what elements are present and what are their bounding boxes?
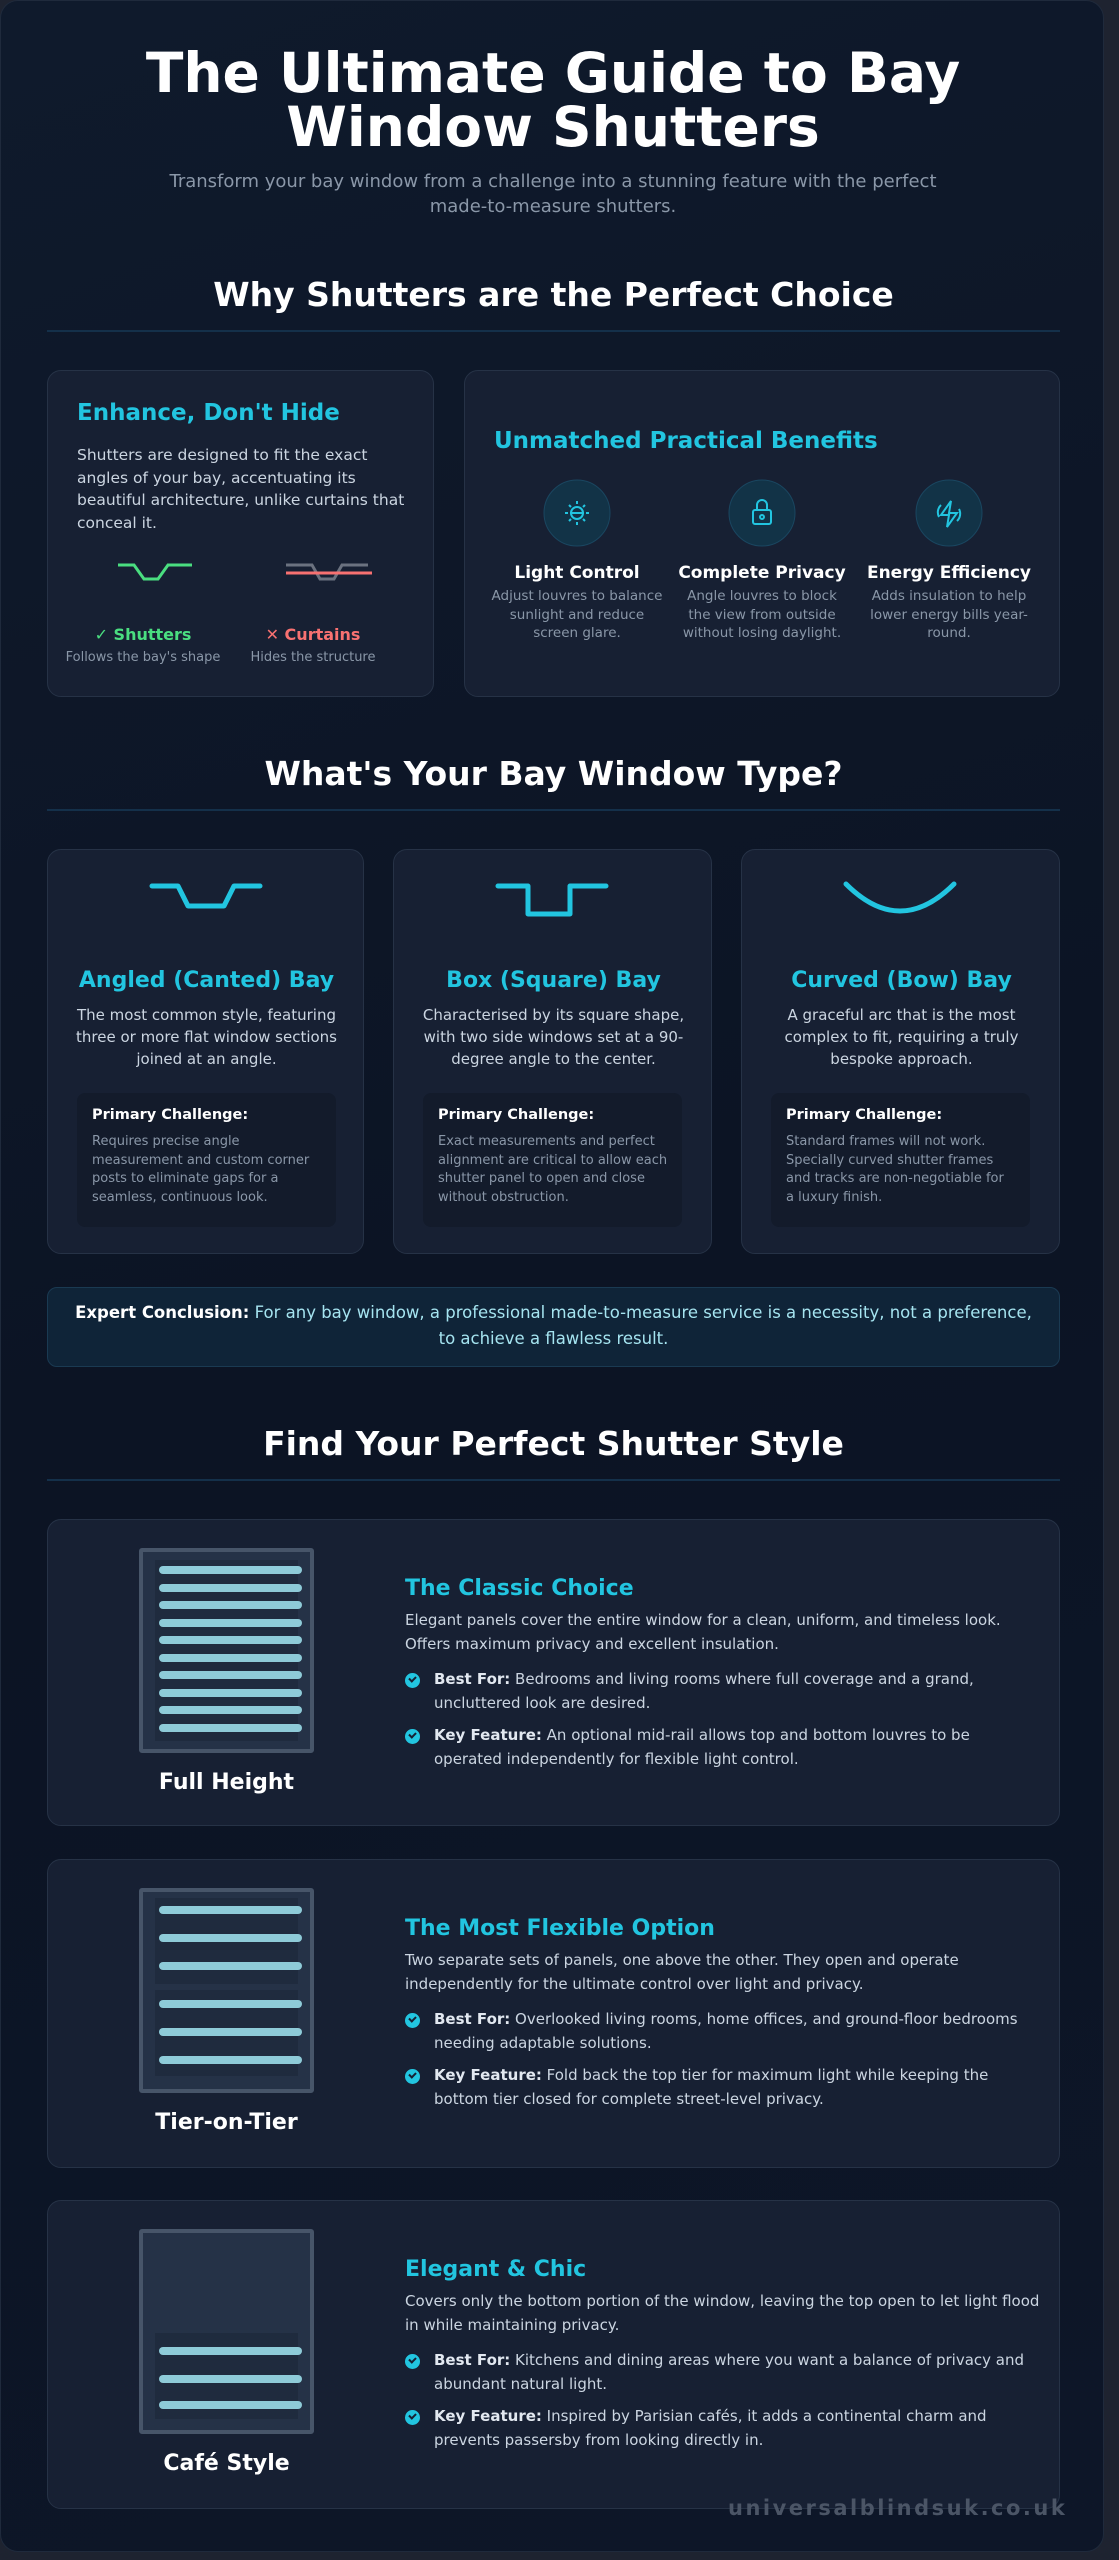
title: angled: Angled (Canted) Bay (79, 968, 334, 993)
panel: tier on tier (47, 1859, 1060, 2168)
title: curved: Curved (Bow) Bay (791, 968, 1012, 993)
icon: cafe shutter (139, 2229, 314, 2434)
text block: classic: Best For: Bedrooms and living rooms where full coverage and a grand, uncluttered look are desired. (434, 1670, 974, 1712)
benefit: energy: Energy Efficiency (867, 563, 1031, 583)
challenge: curved (771, 1093, 1030, 1227)
title: The Ultimate Guide to Bay (146, 41, 960, 105)
label: full height: Full Height (159, 1770, 294, 1795)
benefit: light control: Adjust louvres to balance sunlight and reduce screen glare. (492, 588, 662, 641)
panel: full height (47, 1519, 1060, 1826)
callout: expert conclusion (47, 1287, 1060, 1367)
text block: flexible: Key Feature: Fold back the top tier for maximum light while keeping the bottom tier closed for complete street-level privacy. (434, 2066, 988, 2108)
benefit: privacy: Angle louvres to block the view from outside without losing daylight. (683, 588, 841, 641)
challenge: angled: Primary Challenge: (92, 1107, 248, 1123)
heading: benefits: Unmatched Practical Benefits (494, 428, 878, 454)
label: curtains: Hides the structure (250, 650, 376, 665)
label: shutters (66, 625, 220, 665)
benefit: energy: Adds insulation to help lower energy bills year-round. (870, 588, 1028, 641)
text: enhance: Shutters are designed to fit the exact angles of your bay, accentuating its beautiful architecture, unlike curtains that conceal it. (77, 446, 404, 532)
text block: classic (405, 1576, 1001, 1768)
challenge: box (423, 1093, 682, 1227)
heading: shutter style: Find Your Perfect Shutter Style (263, 1424, 844, 1463)
panel: benefits (464, 370, 1060, 697)
icon: angled (150, 884, 262, 908)
text block: classic: The Classic Choice (405, 1576, 634, 1601)
icon: bolt (916, 480, 982, 546)
text block: classic: Key Feature: An optional mid-rail allows top and bottom louvres to be operated independently for flexible light control. (434, 1726, 970, 1768)
title: box: Box (Square) Bay (446, 968, 661, 993)
challenge: angled: Requires precise angle measurement and custom corner posts to eliminate gaps for a seamless, continuous look. (92, 1134, 309, 1204)
panel: angled bay (47, 849, 364, 1254)
text: box: Characterised by its square shape, with two side windows set at a 90-degree angle to the center. (423, 1006, 684, 1068)
heading: enhance: Enhance, Don't Hide (77, 400, 340, 426)
icon: curved (844, 882, 956, 914)
subtitle: Transform your bay window from a challenge into a stunning feature with the perfect made-to-measure shutters. (169, 171, 936, 217)
heading: bay type: What's Your Bay Window Type? (264, 754, 843, 793)
label: shutters: ✓ Shutters (95, 625, 191, 644)
panel: cafe style (47, 2200, 1060, 2509)
text: curved: A graceful arc that is the most complex to fit, requiring a truly bespoke approach. (784, 1006, 1018, 1068)
text block: elegant: Best For: Kitchens and dining areas where you want a balance of privacy and abundant natural light. (434, 2351, 1024, 2392)
text block: flexible: The Most Flexible Option (405, 1916, 715, 1941)
label: curtains: ✕ Curtains (266, 625, 360, 644)
label: cafe style: Café Style (163, 2451, 290, 2476)
benefit: privacy (678, 480, 846, 641)
challenge: curved: Primary Challenge: (786, 1107, 942, 1123)
panel: curved bay (741, 849, 1060, 1254)
callout: expert conclusion: Expert Conclusion: For any bay window, a professional made-to-measure service is a necessity, not a preference, to achieve a flawless result. (75, 1303, 1032, 1348)
title: Window Shutters (286, 95, 820, 159)
watermark: universalblindsuk.co.uk (728, 2496, 1067, 2520)
panel: box bay (393, 849, 712, 1254)
text block: flexible (404, 1916, 1018, 2108)
challenge: angled (77, 1093, 336, 1227)
label: shutters: Follows the bay's shape (66, 650, 220, 665)
text block: elegant: Elegant & Chic (405, 2257, 586, 2282)
benefit: light control (492, 480, 662, 641)
title (146, 41, 960, 159)
heading: why shutters: Why Shutters are the Perfect Choice (213, 275, 894, 314)
icon: tier shutter (139, 1888, 314, 2093)
challenge: box: Primary Challenge: (438, 1107, 594, 1123)
text block: classic: Elegant panels cover the entire window for a clean, uniform, and timeless look. Offers maximum privacy and excellent insulation. (405, 1611, 1001, 1652)
benefit: privacy: Complete Privacy (678, 563, 846, 583)
text: angled: The most common style, featuring three or more flat window sections joined at an angle. (76, 1006, 337, 1068)
text block: flexible: Best For: Overlooked living rooms, home offices, and ground-floor bedrooms needing adaptable solutions. (434, 2010, 1018, 2052)
text block: elegant: Key Feature: Inspired by Parisian cafés, it adds a continental charm and prevents passersby from looking directly in. (434, 2407, 987, 2448)
icon: sun (544, 480, 610, 546)
label: tier on tier: Tier-on-Tier (155, 2110, 298, 2135)
label: curtains (250, 625, 376, 665)
icon: full height shutter (139, 1548, 314, 1753)
text block: elegant: Covers only the bottom portion of the window, leaving the top open to let light flood in while maintaining privacy. (405, 2292, 1039, 2334)
icon: lock (728, 480, 796, 546)
benefit: energy (867, 480, 1031, 641)
benefit: light control: Light Control (514, 563, 640, 583)
text block: flexible: Two separate sets of panels, one above the other. They open and operate independently for the ultimate control over light and privacy. (405, 1951, 959, 1992)
icon: curtains shape (286, 564, 372, 580)
challenge: box: Exact measurements and perfect alignment are critical to allow each shutter panel to open and close without obstruction. (438, 1134, 667, 1204)
text block: elegant (405, 2257, 1039, 2448)
icon: shutters shape (118, 564, 192, 580)
challenge: curved: Standard frames will not work. Specially curved shutter frames and tracks are non-negotiable for a luxury finish. (786, 1134, 1004, 1204)
icon: box (496, 884, 608, 916)
panel: enhance (47, 370, 434, 697)
